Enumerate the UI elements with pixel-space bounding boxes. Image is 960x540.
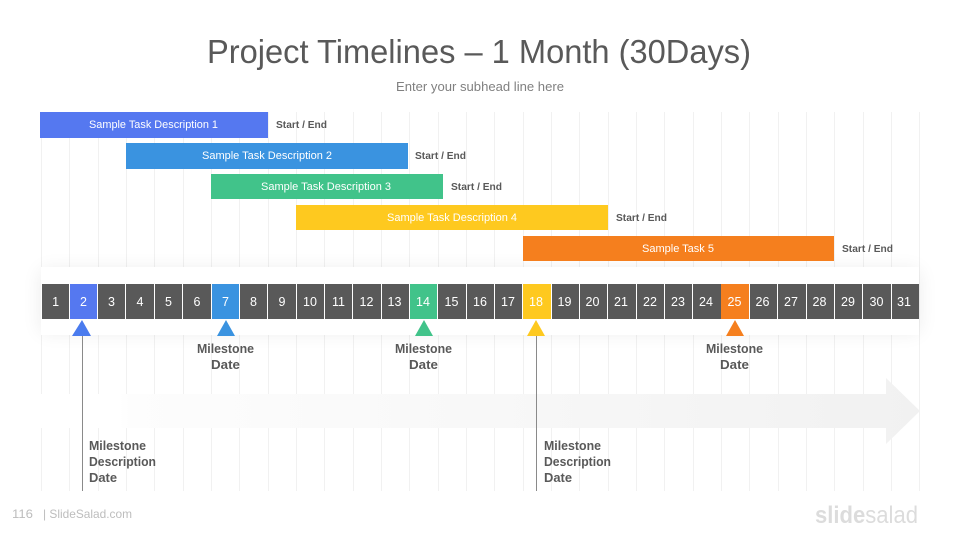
milestone description: day 18: Description [544,455,611,469]
task 3 bar: Start / End [451,181,502,193]
task bars [40,112,893,261]
marker: day 18 [527,320,545,336]
task 1 bar: Start / End [276,119,327,131]
milestone label: day 25 [706,342,763,372]
milestone description: day 18 [544,439,611,485]
leader line: day 18 [536,335,537,491]
task 1 bar: Sample Task Description 1 [89,119,218,131]
milestone label: day 25: Milestone [706,342,763,356]
task 4 bar: Sample Task Description 4 [387,212,517,224]
leader line: day 2 [82,335,83,491]
day strip: 30 [870,295,883,309]
milestone description: day 18: Milestone [544,439,601,453]
day strip: 1 [52,295,59,309]
milestone description: day 2 [89,439,156,485]
background arrow [41,378,920,444]
day strip: 27 [784,295,798,309]
logo: slidesalad [815,502,918,529]
day strip: 31 [897,295,911,309]
task 4 bar: Start / End [616,212,667,224]
day strip: 20 [586,295,599,309]
milestone description: day 2: Description [89,455,156,469]
marker: day 2 [72,320,91,336]
milestone description: day 2: Date [89,471,117,485]
timeline band shadow [41,270,919,332]
milestone label: day 25: Date [720,358,749,372]
day strip: 9 [279,295,286,309]
task 1 bar [40,112,327,138]
day strip: 7 [222,295,229,309]
day strip [41,267,919,335]
marker: day 25 [726,320,744,336]
day strip: 6 [194,295,201,309]
day strip: 14 [416,295,430,309]
day strip: 2 [80,295,87,309]
day strip: 22 [643,295,657,309]
milestone label: day 7: Date [211,358,240,372]
milestone label: day 14: Date [409,358,438,372]
day strip: 8 [250,295,257,309]
day strip: 28 [813,295,826,309]
day strip: 21 [614,295,628,309]
day strip: 15 [445,295,458,309]
day strip: 11 [332,295,345,309]
footer: page number and site: 116 [12,507,33,521]
day strip: 23 [671,295,685,309]
day strip: 10 [303,295,317,309]
task 5 bar: Sample Task 5 [642,243,714,255]
task 2 bar [126,143,466,169]
day strip: 18 [529,295,543,309]
marker: day 14 [415,320,433,336]
milestone label: day 14 [395,342,452,372]
day strip: 26 [756,295,769,309]
task 5 bar: Start / End [842,243,893,255]
day strip: 4 [137,295,144,309]
task 3 bar: Sample Task Description 3 [261,181,391,193]
day strip: 24 [699,295,713,309]
day strip: 13 [388,295,401,309]
day strip: 29 [841,295,855,309]
milestone description: day 2: Milestone [89,439,146,453]
day strip: 25 [728,295,741,309]
task 2 bar: Start / End [415,150,466,162]
day strip: 5 [165,295,172,309]
day strip: 16 [473,295,487,309]
subhead: Enter your subhead line here [396,79,564,94]
day strip: 19 [558,295,571,309]
milestone label: day 7: Milestone [197,342,254,356]
title: Project Timelines – 1 Month (30Days) [207,33,751,70]
milestone label: day 14: Milestone [395,342,452,356]
marker: day 7 [217,320,235,336]
milestone description: day 18: Date [544,471,572,485]
milestone label: day 7 [197,342,254,372]
task 2 bar: Sample Task Description 2 [202,150,332,162]
day strip: 17 [501,295,515,309]
task 3 bar [211,174,502,199]
day strip: 3 [108,295,115,309]
task 5 bar [523,236,893,261]
footer: page number and site: | SlideSalad.com [43,507,132,521]
task 4 bar [296,205,667,230]
day strip: 12 [360,295,373,309]
